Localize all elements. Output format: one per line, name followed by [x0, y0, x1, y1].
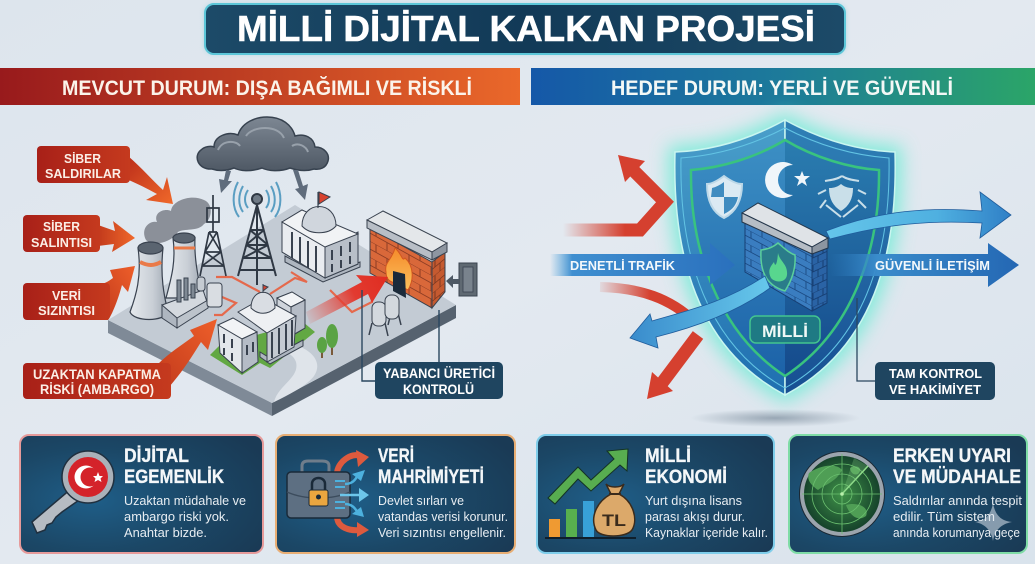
- icon: firewall brick wall: [367, 211, 447, 308]
- text: national economy: Yurt dışına lisans: [645, 494, 742, 508]
- text: early warning: anında korumanya geçe: [893, 526, 1020, 540]
- callout: foreign vendor control: YABANCI ÜRETİCİ: [383, 366, 495, 381]
- text: data privacy: VERİ: [378, 446, 414, 467]
- arrow: cyber leak: [98, 221, 135, 252]
- callout: full control: VE HAKİMİYET: [889, 382, 981, 397]
- label line: foreign vendor: [362, 290, 439, 381]
- label: cyber leak: SALINTISI: [31, 235, 92, 250]
- arrow: controlled traffic: [550, 243, 735, 285]
- text: digital sovereignty: Anahtar bizde.: [124, 526, 207, 540]
- shield: [675, 120, 895, 395]
- icon: growth chart and money bag: [545, 449, 636, 538]
- panel header: current state: MEVCUT DURUM: DIŞA BAĞIMLI VE RİSKLİ: [62, 76, 472, 100]
- icon: small lattice tower: [200, 195, 226, 276]
- arrow: secure communication: [830, 243, 1019, 287]
- icon: refinery unit: [162, 277, 222, 328]
- arrow: blocked red upper: [563, 155, 665, 230]
- text: national economy: MİLLİ: [645, 446, 691, 467]
- icon: external door and arrow: [446, 263, 477, 296]
- text: digital sovereignty: Uzaktan müdahale ve: [124, 494, 246, 508]
- lawn: [210, 322, 315, 375]
- arrow: data leak: [102, 266, 135, 320]
- text: digital sovereignty: ambargo riski yok.: [124, 510, 229, 524]
- icon: wall emblem shield: [761, 243, 795, 291]
- icon: circuit mini shield: [818, 176, 866, 217]
- text: data privacy: Devlet sırları ve: [378, 494, 464, 508]
- callout: full control: TAM KONTROL: [889, 366, 982, 381]
- text: data privacy: Veri sızıntısı engellenir.: [378, 526, 506, 540]
- arrow: outbound blue flow: [630, 276, 770, 348]
- circuit lines: [214, 272, 372, 315]
- card: digital sovereignty: [20, 435, 263, 553]
- label: remote shutdown: RİSKİ (AMBARGO): [40, 382, 154, 397]
- callout: foreign vendor control: KONTROLÜ: [403, 382, 474, 397]
- arrow: red toward firewall: [306, 275, 388, 324]
- icon: storage tanks: [369, 295, 401, 336]
- icon: back cooling tower: [166, 233, 202, 298]
- sparkle watermark: [975, 503, 1012, 541]
- illustration: isometric infrastructure platform: [108, 205, 456, 416]
- text: national economy: Kaynaklar içeride kalır.: [645, 526, 768, 540]
- icon: key: [32, 451, 114, 533]
- panel header: target state: HEDEF DURUM: YERLİ VE GÜVENLİ: [611, 77, 953, 100]
- smoke plume: [144, 198, 211, 243]
- label: cyber attacks: SALDIRILAR: [45, 166, 122, 181]
- arrow: remote shutdown: [157, 319, 217, 387]
- icon: growth chart and money bag: TL: [602, 511, 626, 530]
- card: early warning: [789, 435, 1027, 553]
- text: national economy: parası akışı durur.: [645, 510, 745, 524]
- text: early warning: Saldırılar anında tespit: [893, 494, 1023, 508]
- label: cyber leak: [23, 215, 100, 252]
- label: remote shutdown: UZAKTAN KAPATMA: [33, 367, 161, 382]
- badge: MİLLİ: MİLLİ: [762, 322, 808, 341]
- badge: MİLLİ: [750, 316, 820, 343]
- arrow: cyber attacks: [124, 156, 173, 204]
- label: cyber attacks: [37, 146, 130, 183]
- icon: crescent and star: [765, 162, 810, 198]
- label: data leak: SIZINTISI: [38, 303, 95, 318]
- arrow: controlled traffic: DENETLİ TRAFİK: [570, 258, 676, 273]
- text: data privacy: vatandas verisi korunur.: [378, 510, 508, 524]
- icon: main radio tower: [238, 194, 276, 285]
- icon: trees: [317, 324, 338, 358]
- arrow: cloud down left: [219, 170, 232, 193]
- label: data leak: [23, 283, 110, 320]
- callout: full control: [875, 362, 995, 400]
- icon: radar: [799, 451, 885, 537]
- icon: front cooling tower: [130, 242, 168, 320]
- icon: central firewall: [742, 203, 828, 311]
- text: early warning: ERKEN UYARI: [893, 446, 1011, 467]
- label: cyber attacks: SİBER: [64, 151, 102, 166]
- callout: foreign vendor control: [375, 362, 503, 399]
- title banner: MİLLİ DİJİTAL KALKAN PROJESİ: [237, 8, 815, 49]
- label line: full control: [857, 298, 875, 381]
- icon: wifi signal waves: [234, 182, 280, 217]
- panel header: current state: [0, 68, 520, 105]
- icon: capitol building rear: [282, 192, 360, 282]
- icon: storm cloud: [197, 117, 328, 171]
- icon: briefcase with lock and arrows: [287, 450, 369, 537]
- icon: checked mini shield: [707, 176, 742, 218]
- icon: capitol building front: [218, 284, 305, 373]
- arrow: secure communication: GÜVENLİ İLETİŞİM: [875, 258, 990, 273]
- text: national economy: EKONOMİ: [645, 467, 727, 488]
- card: data privacy: [276, 435, 515, 553]
- arrow: top-right blue flow: [826, 192, 1011, 239]
- text: early warning: edilir. Tüm sistem: [893, 510, 995, 524]
- panel header: target state: [531, 68, 1035, 105]
- text: early warning: VE MÜDAHALE: [893, 467, 1021, 488]
- text: data privacy: MAHRİMİYETİ: [378, 467, 484, 488]
- arrow: cloud down right: [293, 170, 308, 200]
- card: national economy: [537, 435, 774, 553]
- shield glow: [675, 120, 895, 395]
- label: data leak: VERİ: [52, 288, 81, 303]
- platform base: [108, 205, 456, 416]
- label: remote shutdown: [23, 363, 171, 399]
- shield ground shadow: [690, 409, 860, 427]
- label: cyber leak: SİBER: [43, 219, 81, 234]
- text: digital sovereignty: DİJİTAL: [124, 446, 189, 467]
- text: digital sovereignty: EGEMENLİK: [124, 467, 224, 488]
- arrow: blocked red lower: [600, 287, 698, 399]
